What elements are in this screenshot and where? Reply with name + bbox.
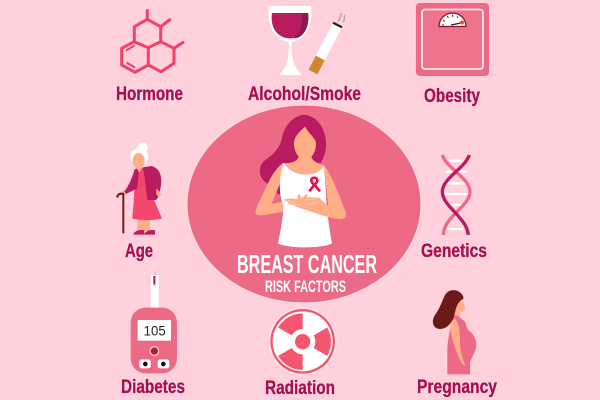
label: alcohol/smoke: Alcohol/Smoke <box>248 84 361 105</box>
icon: pink ribbon <box>309 178 320 191</box>
label: pregnancy: Pregnancy <box>417 377 497 398</box>
risk factor: pregnancy <box>417 290 497 398</box>
label: diabetes: Diabetes <box>121 377 185 398</box>
icon: cigarette <box>309 13 345 74</box>
risk factor: obesity <box>416 3 489 107</box>
icon: radiation symbol <box>269 307 337 375</box>
risk factor: genetics <box>421 155 487 262</box>
label: age: Age <box>125 241 153 262</box>
risk factor: age <box>117 142 162 262</box>
risk factor: alcohol and smoke <box>248 6 361 105</box>
panel: central breast cancer ellipse <box>187 105 421 303</box>
risk factor: diabetes <box>121 275 185 398</box>
icon: DNA helix <box>442 155 470 235</box>
subtitle: risk factors: RISK FACTORS <box>265 278 346 296</box>
icon: glucose meter: 105 <box>144 323 166 338</box>
icon: pregnant woman <box>433 290 476 374</box>
icon: bathroom scale <box>416 3 489 76</box>
label: radiation: Radiation <box>265 378 335 399</box>
icon: hormone molecule <box>122 9 184 72</box>
label: obesity: Obesity <box>424 86 480 107</box>
label: hormone: Hormone <box>116 84 183 105</box>
icon: wine glass <box>269 6 311 75</box>
risk factor: hormone <box>116 9 184 105</box>
illustration: woman with ribbon <box>255 115 346 247</box>
icon: elderly woman with cane <box>117 142 162 235</box>
title: breast cancer: BREAST CANCER <box>237 249 377 279</box>
risk factor: radiation <box>265 307 337 399</box>
label: genetics: Genetics <box>421 241 487 262</box>
